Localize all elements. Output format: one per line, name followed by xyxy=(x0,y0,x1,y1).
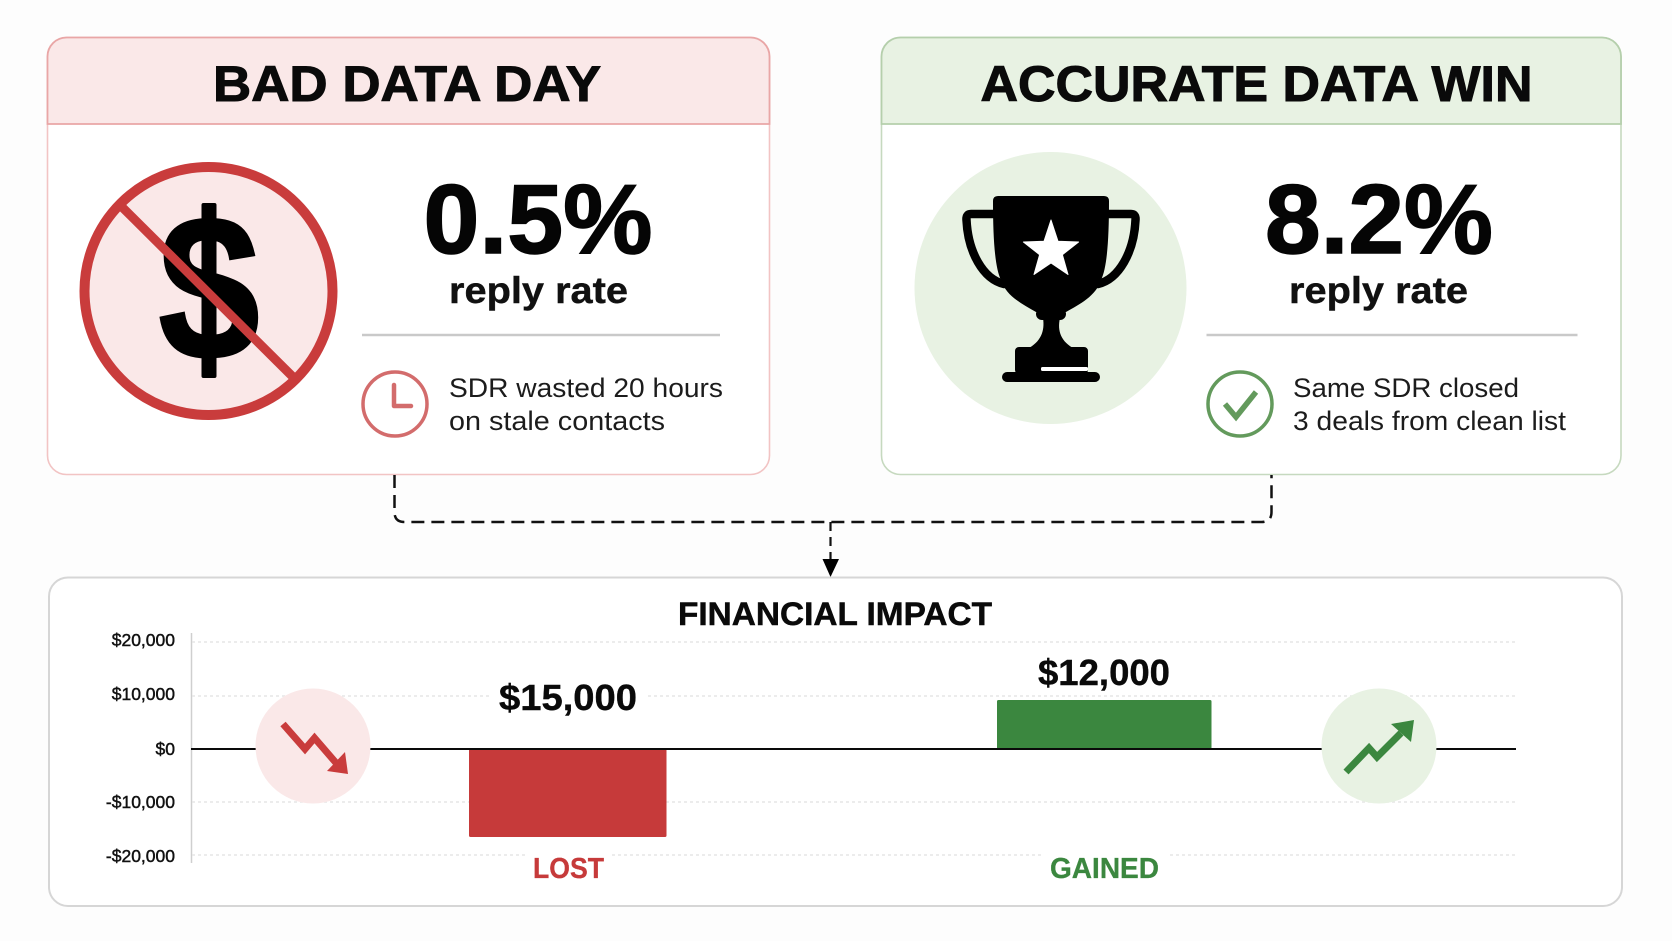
bar: lost xyxy=(469,749,666,837)
label: lost: LOST xyxy=(533,853,604,885)
chart: y axis labels: $0 xyxy=(156,739,175,759)
header: bad data day xyxy=(48,38,770,124)
value: $15,000: $15,000 xyxy=(499,677,637,718)
panel: accurate data win xyxy=(882,38,1621,474)
icon: crossed-out dollar: $ xyxy=(159,173,259,404)
chart: y axis labels: $10,000 xyxy=(112,684,175,704)
icon: trend down xyxy=(256,688,370,804)
icon: clock xyxy=(363,372,427,436)
bar: gained xyxy=(997,700,1212,749)
value: $12,000: $12,000 xyxy=(1038,652,1170,693)
chart: y axis labels xyxy=(106,630,175,866)
heading: financial impact: FINANCIAL IMPACT xyxy=(678,596,992,632)
text: wasted hours xyxy=(449,373,723,436)
stat: 0.5% reply rate: reply rate xyxy=(449,270,628,311)
icon: trend up xyxy=(1322,688,1436,804)
text: wasted hours: SDR wasted 20 hours xyxy=(449,373,723,403)
chart: y axis labels: -$20,000 xyxy=(106,846,175,866)
stat: 8.2% reply rate: reply rate xyxy=(1289,270,1468,311)
header: accurate data win xyxy=(882,38,1621,124)
text: wasted hours: on stale contacts xyxy=(449,406,665,436)
text: closed deals: Same SDR closed xyxy=(1293,373,1519,403)
icon: crossed-out dollar xyxy=(84,167,332,415)
panel: bad data day xyxy=(48,38,770,474)
icon: check circle xyxy=(1208,372,1272,436)
panel: financial impact xyxy=(49,578,1622,906)
header: bad data day: BAD DATA DAY xyxy=(213,56,601,112)
label: gained: GAINED xyxy=(1050,853,1159,885)
stat: 0.5% reply rate: 0.5% xyxy=(424,164,652,274)
header: accurate data win: ACCURATE DATA WIN xyxy=(980,56,1532,112)
text: closed deals xyxy=(1293,373,1567,436)
text: closed deals: 3 deals from clean list xyxy=(1293,406,1567,436)
chart: y axis labels: -$10,000 xyxy=(106,792,175,812)
icon: trophy in circle xyxy=(914,152,1186,424)
arrow: dashed connector to financial impact xyxy=(394,475,1272,577)
stat: 8.2% reply rate: 8.2% xyxy=(1265,164,1493,274)
chart: y axis labels: $20,000 xyxy=(112,630,175,650)
